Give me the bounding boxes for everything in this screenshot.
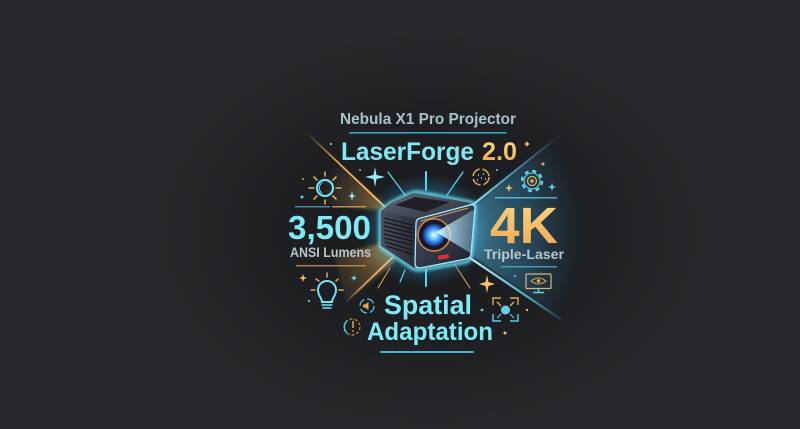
heading: Spatial Adaptation: Adaptation <box>367 318 493 346</box>
projector halo <box>360 174 492 286</box>
bottom underline <box>380 351 474 353</box>
stat: 3,500: ANSI Lumens <box>290 245 371 260</box>
projector glow outline <box>380 192 475 270</box>
lens <box>418 219 450 251</box>
title underline <box>349 132 507 134</box>
stat: 4K <box>484 197 565 268</box>
dark central panel <box>150 32 710 429</box>
blue light beam <box>437 124 600 322</box>
projector <box>360 174 492 286</box>
lens beam <box>436 209 475 254</box>
gold light beam <box>308 134 395 303</box>
icon: monitor with eye <box>526 274 551 292</box>
icon: scatter dial <box>473 169 489 185</box>
projector rays <box>378 172 470 288</box>
heading: LaserForge 2.0: 2.0 <box>482 138 517 166</box>
heading: Spatial Adaptation: Spatial <box>384 290 472 320</box>
icon: light bulb <box>311 273 343 308</box>
red badge <box>438 254 449 260</box>
heading: LaserForge 2.0: LaserForge <box>341 138 474 166</box>
icon: spatial frame <box>493 298 518 321</box>
icon: alert dial <box>344 319 360 335</box>
stat: 3,500 <box>288 206 371 266</box>
stat: 3,500: 3,500 <box>288 209 371 246</box>
icon: speaker <box>360 299 374 313</box>
icon: gear <box>522 171 542 191</box>
projector side with vents <box>381 211 417 268</box>
stat: 4K: 4K <box>490 197 558 254</box>
title: product name: Nebula X1 Pro Projector <box>340 111 516 128</box>
projector front <box>415 205 475 268</box>
icon: sun <box>309 172 341 204</box>
projector top <box>381 193 472 219</box>
stat: 4K: Triple-Laser <box>484 246 565 262</box>
heading: Spatial Adaptation <box>367 290 493 346</box>
sparkles <box>299 141 556 334</box>
